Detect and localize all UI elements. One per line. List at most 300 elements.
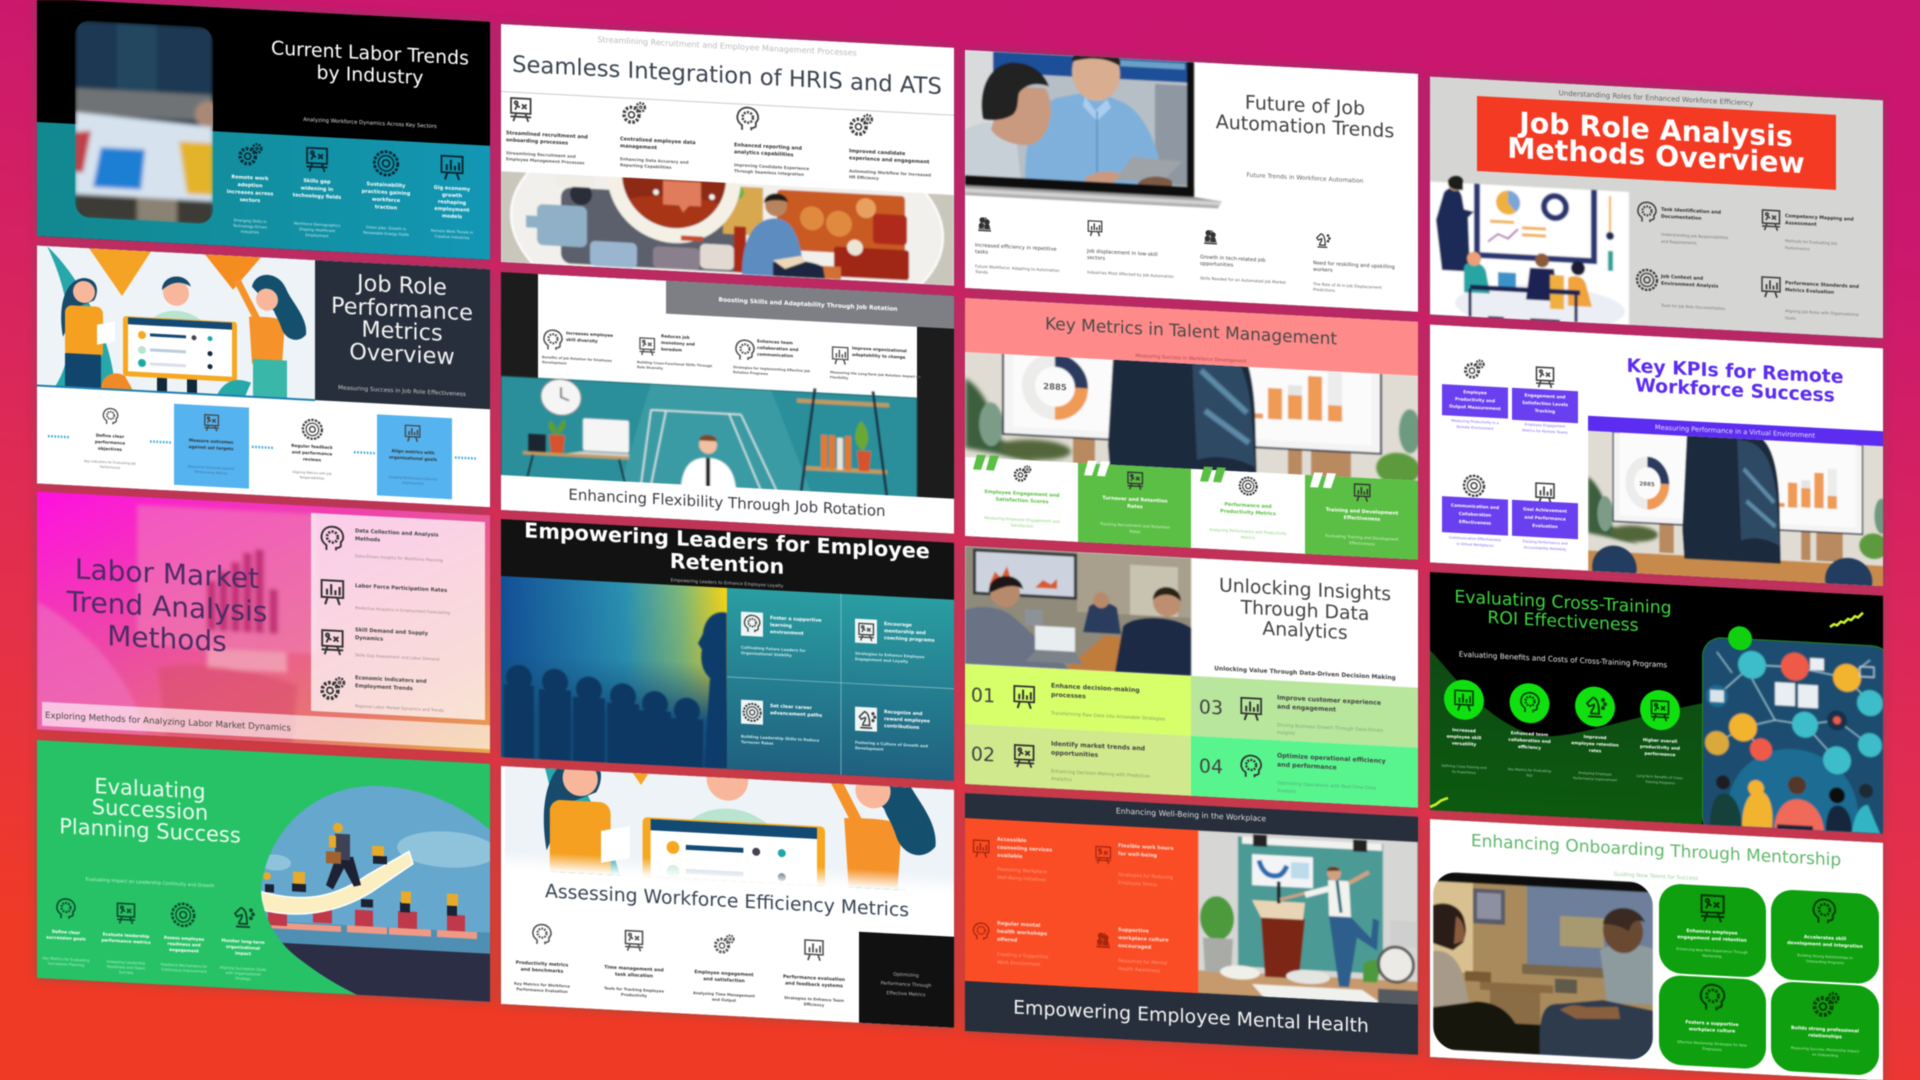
feature text: Set clear career [770,703,813,711]
panel: Empowering Employee Mental Health: Health Awareness [1118,966,1161,974]
panel: Key KPIs for Remote Workforce Success: 2885 [1639,481,1655,488]
icons [1015,465,1370,502]
panel: Job Role Performance Metrics Overview: Responsibilities [300,475,325,481]
panel: Job Role Performance Metrics Overview: Key Indicators for Evaluating Job [84,459,136,466]
panel: Current Labor Trends by Industry [37,0,490,260]
illustration: team at dashboard [1430,174,1629,334]
panel: Evaluating Succession Planning Success: Strategy [235,976,252,981]
panel: Current Labor Trends by Industry: Green Jobs: Growth in [366,225,407,231]
title: Unlocking Insights [1219,575,1391,605]
panel: Evaluating Succession Planning Success: Key Metrics for Evaluating [43,956,89,963]
title: Metrics [361,317,443,347]
panel: Evaluating Cross-Training ROI Effectiveness: Key Metrics for Evaluating [1508,767,1551,773]
title: Through Data [1240,597,1369,625]
panel: Job Role Performance Metrics Overview: Performance [100,465,120,470]
panel: Unlocking Insights Through Data Analytics: Insights [1277,730,1296,737]
feature text columns: sectors [240,197,260,204]
feature text: versatility [1452,741,1476,748]
panel: Job Role Performance Metrics Overview [37,246,497,508]
title: Labor Market [75,553,259,595]
panel: Seamless Integration of HRIS and ATS: Through Seamless Integration [734,168,804,177]
feature text: Turnover and Retention [1102,495,1168,505]
feature text: Employee engagement [694,969,754,978]
panel: Assessing Workforce Efficiency Metrics: Productivity [621,992,648,998]
dotted arrows [48,436,477,459]
feature text: opportunities [1051,750,1099,759]
panel: Job Role Analysis Methods Overview [1430,76,1883,347]
title: by Industry [317,62,423,89]
panel: Evaluating Succession Planning Success: Success [119,970,133,975]
feature text [516,960,845,990]
subtitle: Measuring Success in Job Role Effectiveness [338,385,466,398]
subtitle: Evaluating Impact on Leadership Continuity and Growth [86,877,214,889]
feature text: Job Context and [1660,274,1703,282]
feature text: Rates [1127,504,1143,510]
panel: Enhancing Onboarding Through Mentorship: Enhancing New Hire Experience Through [1676,947,1748,955]
panel: Labor Market Trend Analysis Methods [37,492,490,753]
feature text: Enhances team [757,338,794,345]
right teal grid [727,588,954,781]
feature text: Effectiveness [1459,519,1492,527]
feature text: learning [770,622,792,629]
title [332,273,472,365]
grey subtitle band [666,281,954,329]
feature text: Productivity and [1455,396,1495,404]
icons [544,330,848,366]
feature text: objectives [98,446,123,452]
panel: Job Role Analysis Methods Overview: Tools for Job Role Documentation [1660,303,1726,311]
panel: Evaluating Cross-Training ROI Effectiveness: Training Programs [1644,780,1675,785]
numbers: 02 [971,743,995,767]
panel: Job Role Performance Metrics Overview: Performance Metrics [195,470,228,476]
feature text: Foster a supportive [770,615,822,624]
green cards [1659,883,1879,1076]
feature text: and performance [1277,761,1337,772]
list text: Data Collection and Analysis [355,528,438,539]
title [1507,106,1805,180]
feature text columns [227,174,471,221]
panel: Job Role Performance Metrics Overview: Aligning Metrics with Job [292,470,332,476]
feature text: rates [1589,748,1602,754]
feature text: Time management and [604,964,664,974]
panel: Current Labor Trends by Industry: Renewable Energy Fields [363,231,409,237]
icon row [240,143,463,180]
list text: Economic Indicators and [355,675,427,685]
feature text: available [997,853,1023,860]
purple subtitle band [1588,416,1883,446]
feature text: Recognize and [884,709,922,717]
panel: Enhancing Onboarding Through Mentorship: Building Strong Relationships in [1797,953,1853,960]
panel: Evaluating Cross-Training ROI Effectiveness [1430,572,1892,878]
panel: Empowering Leaders for Employee Retention: Fostering a Culture of Growth and [855,740,928,748]
icons [973,840,1111,947]
feature text columns: Remote work [231,174,269,182]
black callout box [859,932,954,1028]
feature text: Employee [1463,389,1487,396]
feature text: Effectiveness [1344,515,1380,523]
feature text: development and integration [1787,940,1863,950]
panel: Current Labor Trends by Industry: Emerging Skills in [234,218,267,224]
title: ROI Effectiveness [1487,608,1639,636]
feature text: coaching programs [884,635,935,644]
panel: Key KPIs for Remote Workforce Success: in Virtual Workplaces [1457,542,1494,548]
feature text: Higher overall [1643,737,1678,745]
icons [1701,893,1838,1017]
feature text: Optimize operational efficiency [1277,752,1386,765]
feature text: employee skill [1447,734,1482,741]
feature text: engagement [169,947,199,953]
feature text [1051,683,1386,774]
feature text columns: employment [434,206,470,214]
title: Performance [331,293,473,326]
panel: Job Role Analysis Methods Overview: Aligning Job Roles with Organizational [1785,308,1859,317]
feature text: environment [770,629,804,637]
purple KPI boxes [1442,384,1578,539]
feature text: impact [235,950,251,956]
panel: Enhancing Flexibility Through Job Rotation: Measuring the Long-Term Job Rotation Impact on [830,370,921,379]
feature text: sectors [1087,255,1105,262]
panel: Assessing Workforce Efficiency Metrics: Key Metrics for Workforce [514,981,570,989]
feature text columns: Sustainability [367,181,406,189]
photo: two men with tablet on laptop [965,38,1222,208]
feature text: skill diversity [566,337,598,344]
title [524,518,930,587]
feature text: Identify market trends and [1051,741,1145,752]
feature text: contributions [884,723,920,731]
subtitle: Streamlining Recruitment and Employee Management Processes [597,35,857,58]
feature text: Builds strong professional [1791,1025,1859,1035]
panel: Empowering Leaders for Employee Retention: Turnover Rates [741,739,774,746]
title: Empowering Employee Mental Health [1013,997,1369,1037]
feature text columns: traction [375,204,398,211]
panel: Assessing Workforce Efficiency Metrics [501,704,1241,1043]
icons [1637,202,1780,298]
feature text: performance [1645,751,1676,758]
title [1216,90,1394,143]
panel: Key Metrics in Talent Management: Rates [1130,529,1140,534]
feature text: Enhances employee [1686,928,1738,937]
feature text: Task Identification and [1661,207,1721,216]
background photo: monitor [37,500,317,744]
feature text: experience and engagement [849,155,930,166]
icons [533,924,823,961]
title: Workforce Success [1635,375,1835,407]
feature text: Encourage [884,621,912,629]
title: Evaluating Cross-Training [1454,587,1672,619]
panel: Enhancing Flexibility Through Job Rotation: Strategies for Implementing Effective Job [733,365,811,373]
feature text: Increased [1452,727,1476,734]
panel: Assessing Workforce Efficiency Metrics: Efficiency [804,1001,825,1007]
feature text: Growth in tech-related job [1200,254,1265,264]
title: Overview [349,339,455,370]
feature text: Improve customer experience [1277,694,1381,707]
feature text: Accessible [997,837,1027,844]
panel: Key Metrics in Talent Management: Effectiveness [1349,540,1375,547]
feature text [1677,927,1863,1041]
panel: Job Role Performance Metrics Overview: Improvement [402,481,424,486]
panel: Key KPIs for Remote Workforce Success: Measuring Productivity in a [1451,419,1499,425]
panel: Key Metrics in Talent Management [965,298,1425,560]
feature text: Enhanced team [1511,730,1549,738]
panel: Seamless Integration of HRIS and ATS: HR Efficiency [849,174,879,181]
panel: Assessing Workforce Efficiency Metrics: Strategies to Enhance Team [784,995,844,1003]
right translucent panel [311,513,485,720]
feature text [46,928,265,957]
illustration: team with board (zoomed) [501,704,1241,1031]
panel: Key KPIs for Remote Workforce Success: Accountability Remotely [1524,545,1566,552]
feature text: Improve organizational [852,345,907,353]
panel: Current Labor Trends by Industry: Shaping Healthcare [299,227,336,233]
feature text: workplace culture [1689,1026,1735,1035]
feature text: Evaluation [1532,523,1558,530]
feature text: and engagement [1277,703,1336,713]
feature text: reviews [303,456,322,462]
illustration: staircase climb [260,785,491,1002]
panel: Current Labor Trends by Industry: Creative Industries [435,234,469,240]
panel: Empowering Leaders for Employee Retention: Strategies to Enhance Employee [855,651,925,659]
icons [57,897,254,930]
panel: Job Role Analysis Methods Overview: Methods for Evaluating Job [1785,238,1838,246]
feature text: Documentation [1661,214,1701,222]
title [60,777,240,844]
panel: Key KPIs for Remote Workforce Success: Remote Environment [1457,425,1494,431]
title [1454,587,1672,638]
photo: document on desk [75,20,223,226]
panel: Empowering Employee Mental Health: Strategies for Reducing [1118,872,1173,881]
panel: Job Role Analysis Methods Overview: Performance [1785,245,1810,251]
panel: Key KPIs for Remote Workforce Success: Tracking Performance and [1521,539,1568,546]
feature text: Fosters a supportive [1685,1019,1739,1028]
panel: Assessing Workforce Efficiency Metrics: Analyzing Time Management [693,990,755,998]
panel: Empowering Leaders for Employee Retention: Development [855,745,884,752]
panel: Evaluating Succession Planning Success: with Organizational [226,971,260,977]
panel: Labor Market Trend Analysis Methods: Regional Labor Market Dynamics and Trends [355,703,444,713]
icons [103,408,420,444]
title: Succession [92,794,208,825]
title: Automation Trends [1216,111,1394,143]
feature text: Environment Analysis [1661,281,1718,290]
panel: Job Role Performance Metrics Overview: Ongoing Performance Data for [389,475,438,482]
feature text: mentorship and [884,628,926,636]
panel: Empowering Employee Mental Health: Resources for Mental [1118,958,1167,967]
feature text [1449,389,1568,531]
panel: Current Labor Trends by Industry: Workforce Demographics [294,221,340,228]
panel: Evaluating Cross-Training ROI Effectiveness: ROI [1527,774,1532,778]
numbers: 04 [1199,755,1223,779]
photo: man and drink [1198,830,1418,1007]
panel: Key Metrics in Talent Management: Metrics [1241,534,1255,540]
panel: Enhancing Onboarding Through Mentorship: Onboarding Programs [1806,959,1844,965]
panel: Future of Job Automation Trends: Skills Needed for an Automated Job Market [1200,275,1286,285]
panel: Assessing Workforce Efficiency Metrics: Tools for Tracking Employee [604,985,664,994]
panel: Empowering Employee Mental Health: Work Environment [997,960,1040,968]
panel: Seamless Integration of HRIS and ATS: Employee Management Processes [506,156,585,165]
panel: Unlocking Insights Through Data Analytics: Analytics [1051,776,1072,783]
feature text [1447,727,1680,759]
feature text: Productivity Metrics [1220,508,1276,517]
icons [1464,360,1554,504]
illustration: man with ladder and shelves [501,372,917,499]
feature text: task allocation [615,971,653,979]
feature text: Enhanced reporting and [734,142,802,152]
feature text: management [620,143,658,151]
panel: Enhancing Onboarding Through Mentorship: Measuring Success: Mentorship Impact [1791,1046,1860,1054]
photo: integration collage with seated man [501,100,954,348]
numbers: 03 [1199,696,1223,720]
black callout box: Optimizing [893,972,919,979]
title: Evaluating [94,773,206,804]
panel: Enhancing Flexibility Through Job Rotation: Rotation Programs [733,370,768,376]
feature text: against set targets [188,444,234,451]
feature text columns: Skills gap [303,178,331,185]
feature text columns: practices gaining [362,189,411,197]
feature text: analytics capabilities [734,149,794,158]
subtitle: Empowering Leaders to Enhance Employee Loyalty [671,577,784,589]
panel: Unlocking Insights Through Data Analytics: Transforming Raw Data into Actionable Strategies [1050,710,1166,723]
black callout box: Performance Through [881,980,931,989]
panel: Future of Job Automation Trends: Industries Most Affected by Job Automation [1087,269,1174,279]
subtitle: Understanding Roles for Enhanced Workforce Efficiency [1559,89,1753,107]
panel: Key Metrics in Talent Management: Satisfaction [1011,522,1034,529]
feature text: engagement and retention [1677,934,1747,944]
feature text: advancement paths [770,710,822,719]
panel: Labor Market Trend Analysis Methods: Skills Gap Assessment and Labor Demand [355,652,440,662]
panel: Seamless Integration of HRIS and ATS [500,23,955,286]
title [1219,575,1391,646]
panel: Key KPIs for Remote Workforce Success: Communication Effectiveness [1449,536,1501,542]
panel: Seamless Integration of HRIS and ATS: Streamlining Recruitment and [506,150,576,159]
photo: mentor conversation [1433,871,1653,1061]
feature text: workers [1313,267,1333,274]
title: Job Role [355,270,447,301]
title: Seamless Integration of HRIS and ATS [512,52,942,100]
feature text: performance metrics [101,937,151,945]
panel: Evaluating Cross-Training ROI Effectiveness: Performance Improvement [1573,776,1618,782]
feature text: Evaluate leadership [103,931,149,939]
list text: Employment Trends [355,683,413,692]
panel: Empowering Employee Mental Health: Well-Being Initiatives [997,875,1047,883]
feature text: Accelerates skill [1804,934,1847,942]
feature text: Engagement and [1525,392,1565,401]
panel: Key Metrics in Talent Management: Evaluating Training and Development [1325,533,1399,542]
subtitle: Evaluating Benefits and Costs of Cross-Training Programs [1459,650,1667,669]
feature text: boredom [661,346,683,353]
illustration: silhouettes [501,576,727,769]
panel: Evaluating Cross-Training ROI Effectiveness: Analyzing Employee [1578,771,1612,777]
panel: Key Metrics in Talent Management: Measuring Employee Engagement and [984,515,1060,524]
panel: Current Labor Trends by Industry: Industries [241,230,259,235]
panel: Current Labor Trends by Industry: Technology-Driven [232,224,268,230]
title: Retention [670,549,784,579]
panel: Enhancing Flexibility Through Job Rotation: Boosting Skills and Adaptability Through Job Rotation [719,297,897,313]
coloured blocks [965,664,1418,808]
feature text: processes [1051,692,1086,700]
title [271,37,469,92]
panel: Enhancing Flexibility Through Job Rotation: Building Cross-Functional Skills Through [637,360,713,368]
feature text columns: workforce [372,197,401,204]
feature text: Align metrics with [392,448,434,455]
subtitle: Enhancing Well-Being in the Workplace [1116,806,1266,823]
feature text columns: models [442,213,462,220]
panel: Unlocking Insights Through Data Analytics: Optimizing Operations with Real-Time Data [1277,780,1376,792]
panel: Future of Job Automation Trends: Future Workforce: Adapting to Automation [975,264,1060,273]
panel: Enhancing Flexibility Through Job Rotation: Role Diversity [637,365,664,371]
panel: Key KPIs for Remote Workforce Success: Measuring Performance in a Virtual Environment [1655,423,1815,440]
panel: Seamless Integration of HRIS and ATS: Automating Workflow for Increased [849,168,931,178]
photo: dashboard and man [1588,413,1892,605]
feature text: adaptability to change [852,352,906,360]
feature text: Reduces job [661,333,690,340]
illustration: team with board [37,246,315,399]
panel: Enhancing Flexibility Through Job Rotation [501,272,954,534]
icons [741,612,877,732]
panel: Empowering Employee Mental Health: Employee Stress [1118,880,1158,888]
panel: Job Role Analysis Methods Overview: Goals [1785,315,1796,321]
panel: Empowering Employee Mental Health: Promoting Workplace [997,867,1047,875]
panel: Enhancing Onboarding Through Mentorship: Mentorship [1702,954,1723,959]
feature text: monotony and [661,340,695,347]
feature text: Regular mental [997,921,1041,929]
green wave background [1430,650,1702,824]
title: Methods [107,619,227,658]
panel: Empowering Employee Mental Health [965,793,1418,1055]
red title box [1477,96,1836,190]
panel: Key Metrics in Talent Management: 2885 [1043,382,1067,393]
list text [355,528,447,694]
feature text: Streamlined recruitment and [506,130,588,141]
panel: Evaluating Succession Planning Success: Continuous Improvement [161,968,207,974]
panel: Key Metrics in Talent Management: Tracking Recruitment and Retention [1099,521,1170,530]
panel: Evaluating Succession Planning Success: Readiness and Talent [107,965,146,971]
illustration: idea network and people [1702,636,1892,878]
panel: Empowering Employee Mental Health: Creating a Supportive [997,952,1048,960]
numbers: 01 [971,684,995,708]
panel: Enhancing Onboarding Through Mentorship: Employees [1702,1047,1722,1052]
title: Job Role Analysis [1517,106,1793,154]
feature text: Performance evaluation [783,974,845,983]
panel: Seamless Integration of HRIS and ATS: Improving Candidate Experience [734,162,809,171]
panel: Unlocking Insights Through Data Analytics: Enhancing Decision-Making with Predictive [1051,769,1150,780]
feature text [984,489,1399,524]
panel: Empowering Leaders for Employee Retention: Building Leadership Skills to Reduce [741,734,820,743]
list text: Labor Force Participation Rates [355,583,447,594]
panel: Assessing Workforce Efficiency Metrics: and Output [712,997,736,1003]
panel: Job Role Performance Metrics Overview: Measuring Outcomes Against [188,464,235,471]
feature text: Employee Engagement and [984,489,1060,499]
panel: Future of Job Automation Trends: Predictions [1313,287,1335,293]
zigzag accents [1430,590,1863,830]
panel: Unlocking Insights Through Data Analytics [965,546,1418,808]
feature text [1660,207,1859,297]
feature text: Monitor long-term [221,938,265,945]
subtitle: Unlocking Value Through Data-Driven Decision Making [1214,666,1396,682]
feature text: and performance [292,449,332,457]
panel: Evaluating Succession Planning Success: Succession Planning [48,962,84,967]
feature text: communication [757,351,793,358]
black callout box: Effective Metrics [887,990,926,998]
feature text: organizational goals [389,454,438,462]
subtitle: Analyzing Workforce Dynamics Across Key Sectors [303,117,437,130]
feature text: Performance and [1224,502,1272,510]
feature text: Flexible work hours [1118,843,1173,852]
feature text: efficiency [1518,744,1541,751]
panel: Labor Market Trend Analysis Methods: Predictive Analytics in Employment Forecasting [355,605,450,615]
green ball [1728,626,1752,651]
panel: Unlocking Insights Through Data Analytics: Driving Business Growth Through Data-Driven [1277,722,1383,734]
feature text: tasks [975,249,989,256]
feature text [770,615,935,732]
feature text: Increases employee [566,330,613,338]
